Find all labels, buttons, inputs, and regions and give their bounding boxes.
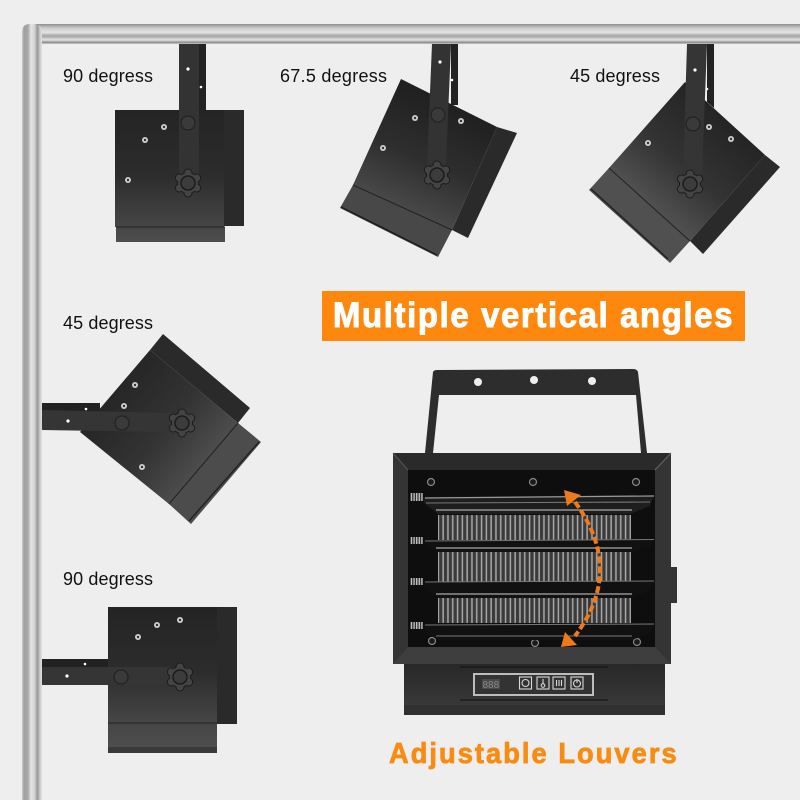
main heater [393,369,677,715]
louver 3 [410,578,655,598]
arrow: louver adjustment [561,490,600,647]
louver 4 [410,622,655,640]
side knob [671,567,677,603]
louver 2 [410,537,655,552]
label: top 45 degrees: 45 degress [570,66,660,86]
caption: adjustable louvers: Adjustable Louvers [389,737,677,769]
heater: wall 90 degrees [42,607,237,753]
frame [393,453,671,664]
label: bottom 90 degrees: 90 degress [63,569,153,589]
control panel: 888 [482,680,500,691]
mounting screws [428,478,640,646]
label: left 45 degrees: 45 degress [63,313,153,333]
heater: hanging 45 degrees [589,44,780,263]
control box [404,664,665,705]
heater: wall 45 degrees [42,334,261,524]
vertical mounting pipe [22,24,42,800]
louver 1 [410,493,654,514]
label: 67.5 degrees: 67.5 degress [280,66,387,86]
handle [425,369,647,453]
horizontal mounting pipe [30,24,800,44]
control panel [473,673,594,696]
heater: hanging 90 degrees [115,44,244,242]
label: top 90 degrees: 90 degress [63,66,153,86]
heater: hanging 67.5 degrees [340,44,517,257]
banner: multiple vertical angles: Multiple vertical angles [333,296,733,335]
heating elements [438,515,631,623]
